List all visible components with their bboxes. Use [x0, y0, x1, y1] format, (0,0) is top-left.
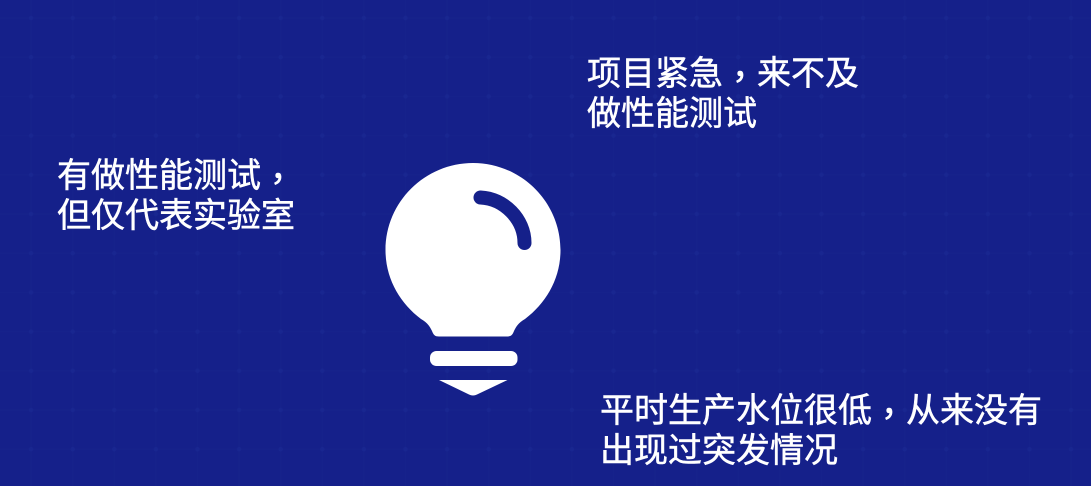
text: bottom right note: 出现过突发情况 — [600, 432, 838, 470]
text: top right note: 项目紧急，来不及 — [587, 50, 859, 99]
text: top right note: 做性能测试 — [587, 95, 757, 133]
bulb glass — [386, 163, 560, 336]
text: left note — [57, 152, 295, 235]
icon: light bulb — [386, 163, 560, 396]
text: left note: 但仅代表实验室 — [57, 197, 295, 235]
text: bottom right note — [600, 387, 1042, 470]
text: top right note — [587, 50, 859, 133]
base bar — [430, 351, 518, 366]
base tip — [439, 380, 508, 395]
text: bottom right note: 平时生产水位很低，从来没有 — [600, 387, 1042, 436]
text: left note: 有做性能测试， — [57, 152, 295, 201]
highlight arc — [480, 198, 524, 243]
